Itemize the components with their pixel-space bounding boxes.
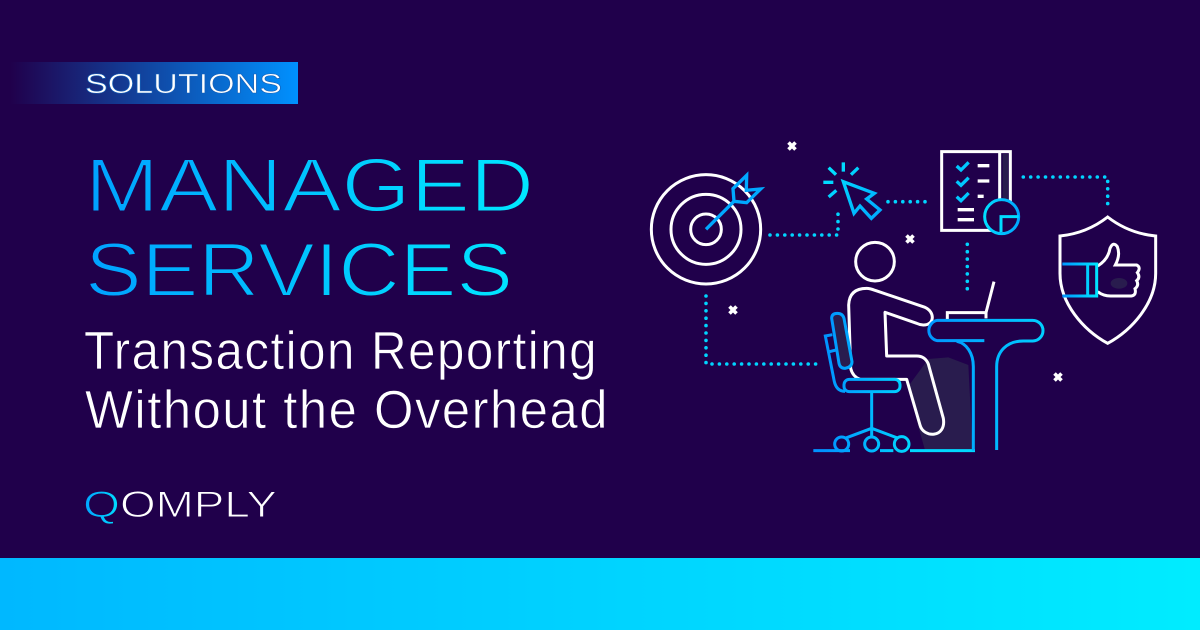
- logo: Qomply: OMPLY: [120, 484, 277, 525]
- subtitle: Without the Overhead: [85, 381, 609, 440]
- shadow under desk: [908, 357, 973, 450]
- title: MANAGED: [85, 144, 534, 229]
- decorative crosses: [730, 142, 1062, 380]
- logo: Qomply: [83, 484, 277, 525]
- chair: [813, 313, 975, 451]
- title: [85, 144, 534, 313]
- laptop: [947, 282, 994, 319]
- icon: mouse cursor: [823, 162, 880, 218]
- category tag: [10, 62, 298, 104]
- icon: checklist with pie chart: [942, 152, 1019, 234]
- subtitle: Transaction Reporting: [84, 322, 598, 381]
- icon: shield with thumbs up: [1060, 217, 1156, 343]
- dotted connectors: [706, 177, 1108, 364]
- icon: target with dart: [651, 175, 761, 284]
- subtitle: [84, 322, 609, 440]
- desk: [929, 320, 1043, 451]
- title: SERVICES: [85, 228, 513, 313]
- person: [849, 242, 944, 434]
- category tag: SOLUTIONS: [85, 68, 282, 99]
- illustration: person at desk: [813, 242, 1043, 451]
- bottom gradient band: [0, 558, 1200, 630]
- logo: Qomply: Q: [83, 484, 120, 525]
